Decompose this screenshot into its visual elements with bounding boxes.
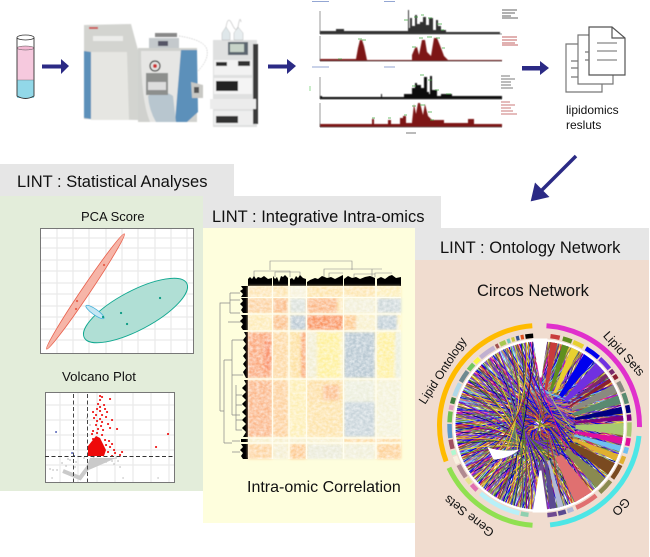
heading: volcano plot: Volcano Plot: [62, 369, 136, 384]
arrow: results to LINT panels: [533, 156, 576, 199]
label: Lipid Sets: Lipid Sets: [600, 329, 647, 379]
heatmap separators: [248, 286, 401, 459]
panel: integrative intra-omics: [203, 196, 441, 523]
arrow: instrument to chromatograms: [268, 59, 296, 74]
icon: mass spectrometer: [84, 24, 207, 122]
chart: PCA score plot: [40, 228, 196, 355]
caption: intra-omic correlation: Intra-omic Correlation: [247, 479, 401, 496]
outer category arcs: [410, 296, 650, 555]
text: lipidomics results: lipidomics: [566, 103, 619, 117]
segment ring: [412, 298, 650, 553]
chords: [406, 292, 650, 557]
chart: mass spectra: [310, 2, 518, 133]
heading: statistical analyses: LINT : Statistical Analyses: [17, 173, 207, 191]
white disc: [453, 339, 626, 512]
top dendrogram: [254, 261, 392, 277]
icon: liquid chromatography stack: [210, 19, 258, 127]
heatmap cells: [248, 286, 401, 459]
icon: documents: [566, 27, 625, 92]
chart: clustered correlation heatmap: [220, 261, 401, 459]
arrow: sample to instrument: [42, 59, 69, 74]
label: Gene Sets: Gene Sets: [442, 492, 497, 540]
white gaps between chord fans: [488, 338, 548, 512]
label: GO: GO: [609, 495, 633, 519]
heading: PCA score: PCA Score: [81, 209, 145, 224]
label: Lipid Ontology: Lipid Ontology: [416, 335, 469, 407]
heading: integrative intra-omics: LINT : Integrative Intra-omics: [212, 208, 424, 226]
wedges at the rim: [537, 342, 624, 510]
panel: statistical analyses: [0, 164, 234, 491]
chart: circos network: [406, 292, 650, 557]
icon: sample tube: [17, 35, 34, 98]
left dendrogram: [220, 293, 243, 452]
text: lipidomics results: resluts: [566, 118, 601, 132]
heading: ontology network: LINT : Ontology Network: [440, 239, 621, 257]
heading: circos network: Circos Network: [477, 282, 590, 300]
arrow: chromatograms to results: [522, 61, 549, 75]
panel: ontology network: [415, 228, 649, 557]
chart: volcano plot: [45, 392, 174, 482]
centre tangle of chords: [528, 414, 552, 438]
